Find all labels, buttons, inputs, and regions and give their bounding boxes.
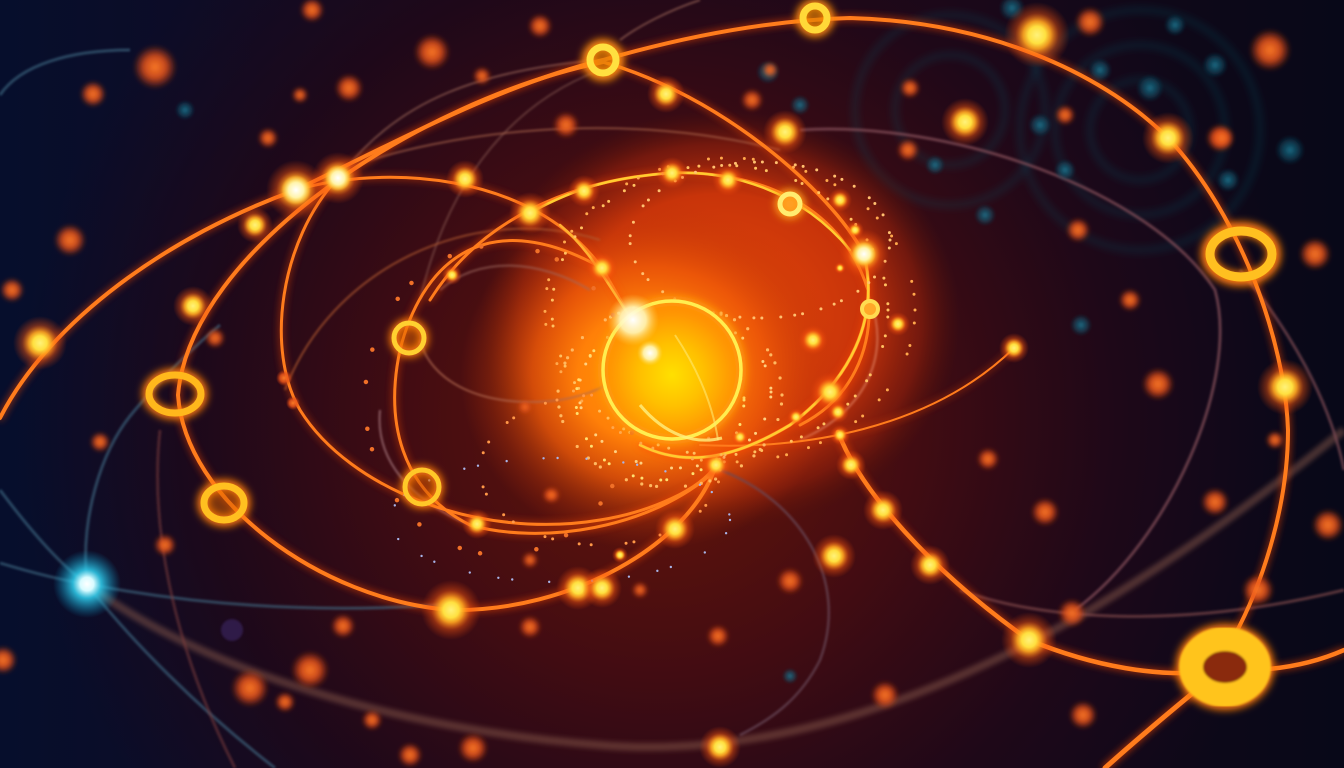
sun flare: [607, 294, 659, 346]
sun ring at centre: [603, 294, 741, 440]
ring nodes: [148, 4, 1274, 697]
central glow: [460, 110, 960, 550]
sun inner streaks: [640, 335, 722, 440]
cyan bright node: [53, 550, 121, 618]
teal blurred dots: [175, 0, 1305, 684]
particle cloud around core: [365, 158, 915, 582]
faint blue orbit lines: [0, 50, 440, 768]
yellow inner orbit highlights: [530, 173, 868, 458]
concentric teal rings, upper right: [855, 10, 1260, 250]
